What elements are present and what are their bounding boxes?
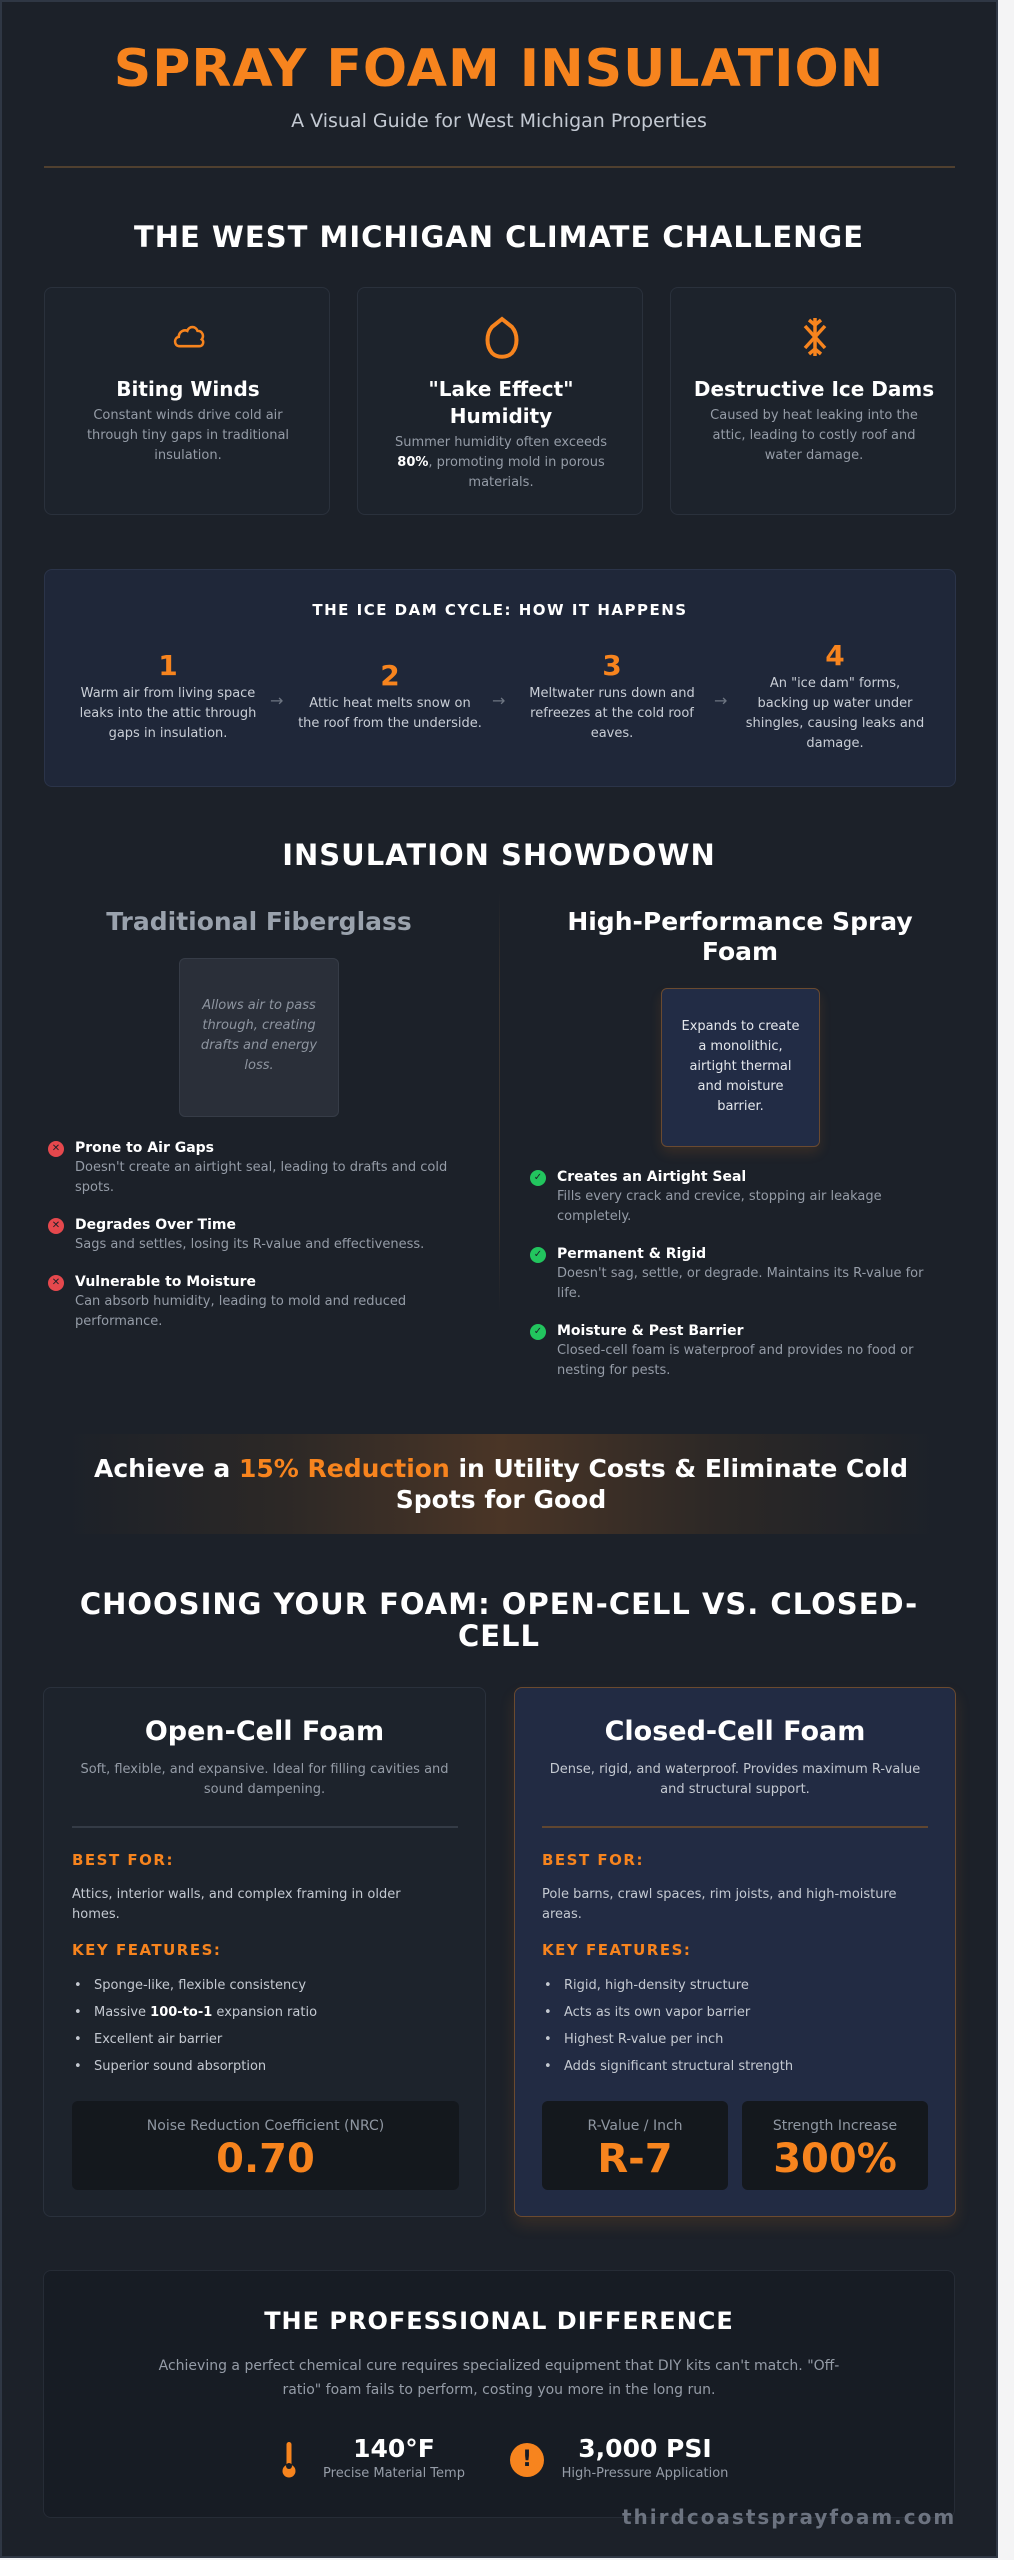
icon: snowflake [804, 318, 826, 356]
box: spray foam: and moisture [698, 1079, 784, 1094]
stat: R-value: R-Value / Inch [587, 2118, 683, 2134]
step 3: refreezes at the cold roof [530, 706, 694, 721]
text: humidity: "Lake Effect" [428, 377, 574, 401]
panel: open-cell [43, 1687, 486, 2217]
stat: R-value [542, 2101, 728, 2190]
heading: choosing foam: CELL [458, 1619, 540, 1653]
icon: thermometer [282, 2442, 296, 2478]
text: biting winds: insulation. [154, 448, 222, 463]
heading: fiberglass: Traditional Fiberglass [106, 907, 412, 936]
banner: savings: Achieve a 15% Reduction in Utility Costs & Eliminate Cold [94, 1454, 908, 1483]
box: spray foam: a monolithic, [698, 1039, 783, 1054]
item: airtight: Creates an Airtight Seal [557, 1169, 746, 1185]
icon: warning: ! [522, 2447, 532, 2472]
arrow 1: → [270, 691, 283, 710]
item: barrier: Moisture & Pest Barrier [557, 1323, 743, 1339]
item: moisture: performance. [75, 1314, 162, 1329]
item: degrades: Degrades Over Time [75, 1217, 236, 1233]
key features: open-cell: • [74, 1978, 82, 1993]
footer: website: thirdcoastsprayfoam.com [622, 2505, 956, 2529]
text: biting winds: Biting Winds [116, 377, 260, 401]
column: spray foam: ✓ [534, 1172, 542, 1183]
item: air gaps [48, 1140, 447, 1195]
key features: closed-cell [542, 1941, 793, 2074]
steps [80, 639, 924, 751]
box: fiberglass: drafts and energy [201, 1038, 317, 1053]
stat: temp [323, 2434, 465, 2481]
step 1: Warm air from living space [81, 686, 255, 701]
key features: closed-cell: • [544, 2059, 552, 2074]
column: spray foam: ✓ [534, 1249, 542, 1260]
step 3: eaves. [591, 726, 633, 741]
title: open-cell: Open-Cell Foam [145, 1716, 384, 1747]
text: biting winds [87, 377, 289, 463]
item: barrier [530, 1323, 914, 1378]
panel: biting winds [44, 287, 330, 515]
stat: strength: 300% [773, 2136, 897, 2182]
item: permanent [530, 1246, 924, 1301]
key features: closed-cell: • [544, 1978, 552, 1993]
stat: NRC: Noise Reduction Coefficient (NRC) [147, 2118, 384, 2134]
title: SPRAY FOAM INSULATION [114, 39, 884, 99]
stat: strength: Strength Increase [773, 2118, 897, 2134]
stat: pressure: High-Pressure Application [562, 2466, 728, 2481]
text: biting winds: through tiny gaps in traditional [87, 428, 289, 443]
icon: cloud [174, 326, 204, 348]
item: barrier: nesting for pests. [557, 1363, 670, 1378]
desc: closed-cell: Dense, rigid, and waterproof. Provides maximum R-value [550, 1762, 920, 1777]
item: permanent: Doesn't sag, settle, or degrade. Maintains its R-value for [557, 1266, 923, 1281]
item: moisture: Can absorb humidity, leading to mold and reduced [75, 1294, 406, 1309]
desc: closed-cell: and structural support. [660, 1782, 810, 1797]
heading: climate challenge: THE WEST MICHIGAN CLIMATE CHALLENGE [134, 220, 864, 254]
item: moisture: Vulnerable to Moisture [75, 1274, 256, 1290]
text: professional: ratio" foam fails to perform, costing you more in the long run. [283, 2382, 715, 2398]
box: spray foam: barrier. [717, 1099, 764, 1114]
key features: closed-cell: Adds significant structural strength [564, 2059, 793, 2074]
step 1: gaps in insulation. [109, 726, 227, 741]
desc: open-cell [80, 1762, 449, 1797]
key features: open-cell [72, 1941, 317, 2074]
stat: pressure [562, 2434, 728, 2481]
item: air gaps: Doesn't create an airtight seal, leading to drafts and cold [75, 1160, 447, 1175]
step 2: 2 [380, 659, 400, 692]
desc: open-cell: sound dampening. [204, 1782, 325, 1797]
panel: ice dam cycle [44, 569, 956, 787]
panel: ice dams [670, 287, 956, 515]
key features: closed-cell: KEY FEATURES: [542, 1941, 691, 1959]
column: fiberglass [48, 907, 447, 1329]
panel: humidity [357, 287, 643, 515]
box: spray foam: airtight thermal [689, 1059, 792, 1074]
step 4 [746, 639, 924, 751]
key features: open-cell: Massive 100-to-1 expansion ratio [94, 2005, 317, 2020]
text: humidity: materials. [468, 475, 534, 490]
item: permanent: Permanent & Rigid [557, 1246, 706, 1262]
stat: temp: Precise Material Temp [323, 2466, 465, 2481]
step 4: 4 [825, 639, 845, 672]
step 4: shingles, causing leaks and [746, 716, 924, 731]
step 4: An "ice dam" forms, [770, 676, 900, 691]
box: spray foam [661, 988, 820, 1147]
column: fiberglass: ✕ [52, 1143, 60, 1154]
stat: temp: 140°F [353, 2434, 435, 2463]
step 4: damage. [806, 736, 864, 751]
best for: closed-cell: Pole barns, crawl spaces, rim joists, and high-moisture [542, 1887, 897, 1902]
key features: open-cell: KEY FEATURES: [72, 1941, 221, 1959]
heading: showdown: INSULATION SHOWDOWN [282, 838, 716, 872]
item: degrades [48, 1217, 424, 1252]
heading: ice dam cycle: THE ICE DAM CYCLE: HOW IT HAPPENS [312, 601, 688, 619]
step 1: 1 [158, 649, 178, 682]
step 3 [529, 649, 695, 741]
item: air gaps: spots. [75, 1180, 114, 1195]
key features: open-cell: Excellent air barrier [94, 2032, 222, 2047]
key features: open-cell: Sponge-like, flexible consistency [94, 1978, 306, 1993]
icon: warning [510, 2443, 544, 2477]
text: professional: Achieving a perfect chemical cure requires specialized equipment that DIY kits can't match. "Off- [159, 2358, 839, 2374]
heading: choosing foam: CHOOSING YOUR FOAM: OPEN-CELL VS. CLOSED- [80, 1587, 918, 1621]
text: humidity [395, 377, 607, 490]
stat: pressure: 3,000 PSI [578, 2434, 712, 2463]
key features: closed-cell: Acts as its own vapor barrier [564, 2005, 750, 2020]
text: humidity: 80%, promoting mold in porous [397, 455, 605, 470]
item: moisture [48, 1274, 406, 1329]
text: ice dams: Caused by heat leaking into the [710, 408, 918, 423]
best for: open-cell: homes. [72, 1907, 120, 1922]
heading: spray foam [567, 907, 913, 966]
best for: closed-cell: BEST FOR: [542, 1851, 644, 1869]
text: professional [158, 2358, 839, 2398]
box: fiberglass: Allows air to pass [202, 998, 316, 1013]
step 2 [298, 659, 482, 731]
item: permanent: life. [557, 1286, 581, 1301]
column: spray foam [530, 907, 924, 1378]
text: ice dams: attic, leading to costly roof and [712, 428, 915, 443]
arrow 3: → [714, 691, 727, 710]
stat: strength [742, 2101, 928, 2190]
step 1: leaks into the attic through [80, 706, 256, 721]
box: spray foam: Expands to create [682, 1019, 799, 1034]
text: biting winds: Constant winds drive cold air [93, 408, 283, 423]
item: airtight: completely. [557, 1209, 631, 1224]
best for: open-cell: BEST FOR: [72, 1851, 174, 1869]
box: fiberglass [179, 958, 339, 1117]
box: fiberglass: through, creating [202, 1018, 316, 1033]
panel: closed-cell [514, 1687, 956, 2217]
column: spray foam: ✓ [534, 1326, 542, 1337]
stat: R-value: R-7 [597, 2136, 673, 2182]
arrow 2: → [492, 691, 505, 710]
text: humidity: Summer humidity often exceeds [395, 435, 607, 450]
best for: open-cell [72, 1851, 401, 1922]
key features: open-cell: • [74, 2005, 82, 2020]
banner: savings: Spots for Good [396, 1485, 606, 1514]
step 3: Meltwater runs down and [529, 686, 695, 701]
step 1 [80, 649, 256, 741]
heading: spray foam: Foam [702, 937, 778, 966]
key features: closed-cell: Rigid, high-density structure [564, 1978, 749, 1993]
icon: drop [486, 316, 518, 359]
subtitle: A Visual Guide for West Michigan Properties [291, 110, 707, 132]
desc: closed-cell [550, 1762, 920, 1797]
key features: open-cell: • [74, 2032, 82, 2047]
column: fiberglass: ✕ [52, 1277, 60, 1288]
key features: closed-cell: • [544, 2005, 552, 2020]
banner: savings [65, 1434, 937, 1534]
step 2: Attic heat melts snow on [309, 696, 471, 711]
step 3: 3 [602, 649, 622, 682]
heading: spray foam: High-Performance Spray [567, 907, 913, 936]
desc: open-cell: Soft, flexible, and expansive. Ideal for filling cavities and [80, 1762, 449, 1777]
key features: open-cell: Superior sound absorption [94, 2059, 266, 2074]
best for: open-cell: Attics, interior walls, and complex framing in older [72, 1887, 401, 1902]
item: air gaps: Prone to Air Gaps [75, 1140, 214, 1156]
stat: NRC [72, 2101, 459, 2190]
heading: professional: THE PROFESSIONAL DIFFERENCE [264, 2307, 734, 2335]
item: barrier: Closed-cell foam is waterproof and provides no food or [557, 1343, 913, 1358]
item: airtight [530, 1169, 882, 1224]
stat: NRC: 0.70 [216, 2136, 315, 2182]
panel: professional difference [43, 2270, 955, 2518]
step 2: the roof from the underside. [298, 716, 482, 731]
text: humidity: Humidity [450, 404, 552, 428]
step 4: backing up water under [758, 696, 912, 711]
text: ice dams: Destructive Ice Dams [694, 377, 934, 401]
box: fiberglass: loss. [244, 1058, 274, 1073]
item: airtight: Fills every crack and crevice, stopping air leakage [557, 1189, 882, 1204]
text: ice dams: water damage. [765, 448, 863, 463]
best for: closed-cell [542, 1851, 897, 1922]
heading: choosing foam [80, 1587, 918, 1653]
text: ice dams [694, 377, 934, 463]
best for: closed-cell: areas. [542, 1907, 582, 1922]
item: degrades: Sags and settles, losing its R-value and effectiveness. [75, 1237, 424, 1252]
title: closed-cell: Closed-Cell Foam [605, 1716, 865, 1747]
key features: closed-cell: Highest R-value per inch [564, 2032, 723, 2047]
key features: open-cell: • [74, 2059, 82, 2074]
key features: closed-cell: • [544, 2032, 552, 2047]
column: fiberglass: ✕ [52, 1220, 60, 1231]
